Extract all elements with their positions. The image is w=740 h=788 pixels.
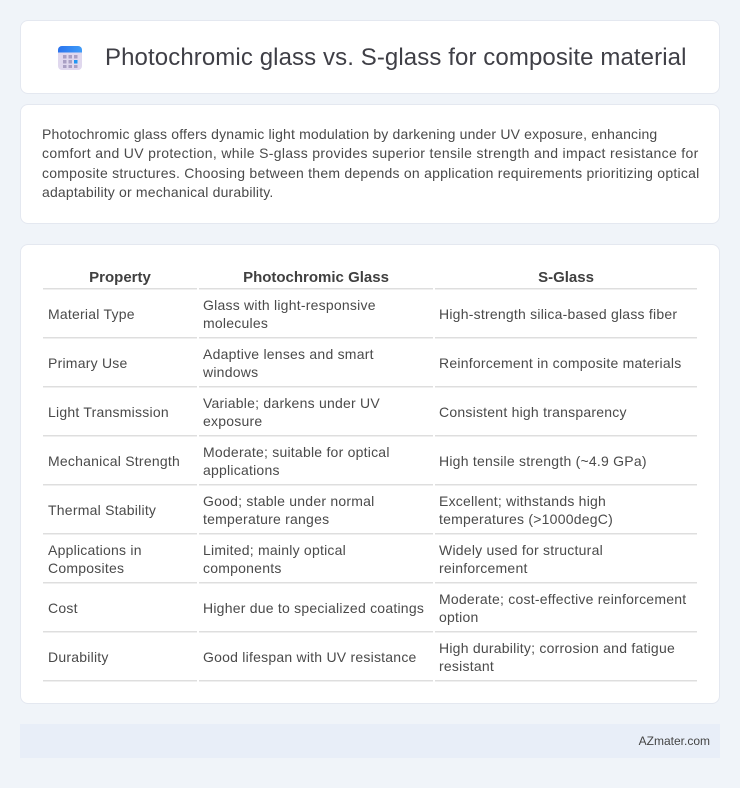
row: Cost: option xyxy=(439,609,479,625)
title: Photochromic glass vs. S-glass for composite material xyxy=(105,44,687,71)
row: Mechanical Strength: applications xyxy=(203,462,280,478)
row: Cost: Moderate; cost-effective reinforcement xyxy=(439,591,686,607)
footer bar xyxy=(20,724,720,758)
table header: Property xyxy=(89,269,151,286)
row: Cost: Higher due to specialized coatings xyxy=(203,600,424,616)
row: Thermal Stability: Excellent; withstands high xyxy=(439,493,606,509)
row: Durability xyxy=(43,640,697,682)
row: Mechanical Strength xyxy=(43,444,697,486)
row: Primary Use: windows xyxy=(203,364,258,380)
row: Light Transmission: Light Transmission xyxy=(48,404,169,420)
row: Cost: Cost xyxy=(48,600,78,616)
table header: S-Glass xyxy=(538,269,594,286)
row: Mechanical Strength: Moderate; suitable for optical xyxy=(203,444,390,460)
panel: title card xyxy=(20,20,720,94)
text block: summary: Photochromic glass offers dynamic light modulation by darkening under UV exposure, enhancing xyxy=(42,126,657,142)
row: Durability: High durability; corrosion and fatigue xyxy=(439,640,675,656)
row: Durability: resistant xyxy=(439,658,494,674)
row: Primary Use xyxy=(43,346,697,388)
row: Applications in Composites xyxy=(43,542,697,584)
row: Thermal Stability: temperature ranges xyxy=(203,511,329,527)
row: Mechanical Strength: Mechanical Strength xyxy=(48,453,180,469)
row: Applications in Composites: Composites xyxy=(48,560,124,576)
text block: summary: adaptability or mechanical durability. xyxy=(42,184,273,200)
row: Thermal Stability: Good; stable under normal xyxy=(203,493,375,509)
row: Cost xyxy=(43,591,697,633)
row: Primary Use: Primary Use xyxy=(48,355,128,371)
row: Light Transmission: Variable; darkens under UV xyxy=(203,395,380,411)
row: Applications in Composites: Widely used for structural xyxy=(439,542,603,558)
row: Light Transmission: exposure xyxy=(203,413,262,429)
row: Mechanical Strength: High tensile strength (~4.9 GPa) xyxy=(439,453,647,469)
table header xyxy=(43,269,697,290)
row: Applications in Composites: components xyxy=(203,560,282,576)
row: Durability: Good lifespan with UV resistance xyxy=(203,649,417,665)
table header: Photochromic Glass xyxy=(243,269,389,286)
text block: summary: comfort and UV protection, while S-glass provides superior tensile strength and impact resistance for xyxy=(42,145,699,161)
row: Material Type: Material Type xyxy=(48,306,135,322)
row: Applications in Composites: Applications in xyxy=(48,542,142,558)
row: Thermal Stability xyxy=(43,493,697,535)
row: Durability: Durability xyxy=(48,649,109,665)
row: Applications in Composites: reinforcement xyxy=(439,560,528,576)
row: Light Transmission xyxy=(43,395,697,437)
row: Primary Use: Reinforcement in composite materials xyxy=(439,355,682,371)
footer text: AZmater.com xyxy=(639,734,710,748)
row: Applications in Composites: Limited; mainly optical xyxy=(203,542,346,558)
row: Material Type: High-strength silica-based glass fiber xyxy=(439,306,677,322)
row: Thermal Stability: Thermal Stability xyxy=(48,502,156,518)
row: Material Type: molecules xyxy=(203,315,268,331)
text block: summary xyxy=(42,126,699,200)
panel: comparison table card xyxy=(20,244,720,704)
row: Light Transmission: Consistent high transparency xyxy=(439,404,627,420)
icon: calendar xyxy=(58,46,82,70)
text block: summary: composite structures. Choosing between them depends on application requirements prioritizing optical xyxy=(42,165,699,181)
row: Material Type xyxy=(43,297,697,339)
row: Primary Use: Adaptive lenses and smart xyxy=(203,346,374,362)
panel: summary card xyxy=(20,104,720,224)
row: Thermal Stability: temperatures (>1000degC) xyxy=(439,511,613,527)
row: Material Type: Glass with light-responsive xyxy=(203,297,376,313)
